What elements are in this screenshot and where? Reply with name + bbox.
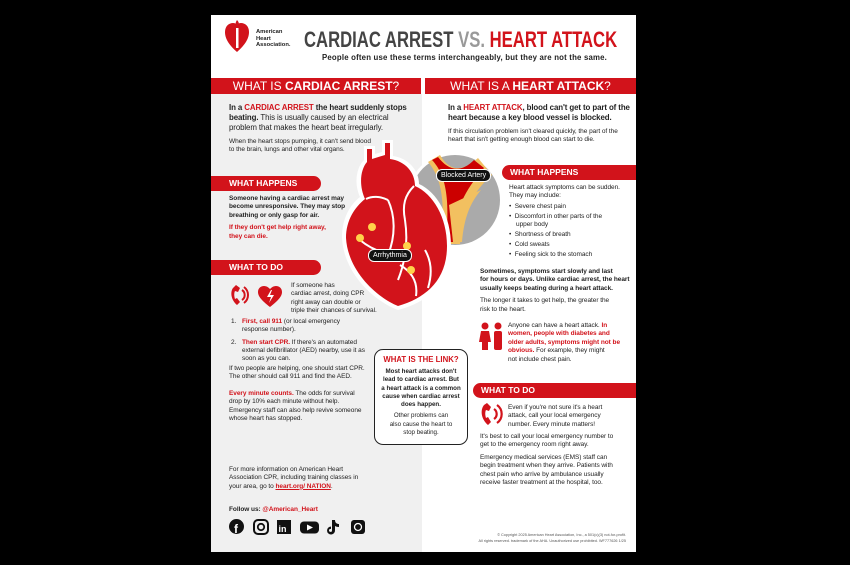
anyone text: not include chest pain. bbox=[508, 356, 572, 363]
text: chest pain who arrive by ambulance usually bbox=[480, 471, 604, 478]
label: blocked artery: Blocked Artery bbox=[441, 172, 486, 179]
every minute counts bbox=[229, 390, 362, 422]
logo: American bbox=[256, 29, 282, 35]
steps list: external defibrillator (AED) nearby, use it as bbox=[242, 347, 365, 354]
page bbox=[211, 15, 636, 552]
every minute counts: Every minute counts. The odds for survival bbox=[229, 390, 355, 397]
steps list: soon as you can. bbox=[242, 355, 290, 362]
callout: what is the link: Other problems can bbox=[394, 412, 448, 419]
callout: what is the link: cause when cardiac arrest bbox=[382, 393, 460, 400]
every minute counts: drop by 10% each minute without help. bbox=[229, 398, 339, 405]
symptoms: • Discomfort in other parts of the bbox=[509, 213, 602, 220]
copyright: All rights reserved. trademark of the AHA. Unauthorized use prohibited. WF777626 1/25 bbox=[478, 538, 626, 542]
left what happens text bbox=[229, 195, 345, 240]
logo: Association. bbox=[256, 42, 290, 48]
right what to do text: number. Every minute matters! bbox=[508, 421, 595, 428]
text: It's best to call your local emergency number to bbox=[480, 433, 613, 440]
right intro: heart because a key blood vessel is blocked. bbox=[448, 113, 612, 122]
text: get to the emergency room right away. bbox=[480, 441, 589, 448]
steps list: 2. bbox=[231, 339, 236, 346]
right intro: If this circulation problem isn't cleared quickly, the part of the bbox=[448, 128, 618, 135]
sometimes text: usually keeps beating during a heart attack. bbox=[480, 285, 613, 292]
right intro: In a HEART ATTACK, blood can't get to part of the bbox=[448, 103, 630, 112]
callout: what is the link: WHAT IS THE LINK? bbox=[383, 355, 459, 364]
pill: what happens left: WHAT HAPPENS bbox=[229, 178, 297, 188]
left intro: beating. This is usually caused by an electrical bbox=[229, 113, 389, 122]
sometimes text: Sometimes, symptoms start slowly and last bbox=[480, 268, 613, 275]
sometimes text: for hours or days. Unlike cardiac arrest, the heart bbox=[480, 276, 630, 283]
CPR text bbox=[291, 282, 377, 314]
follow us: Follow us: @American_Heart bbox=[229, 506, 318, 513]
pill: what to do left: WHAT TO DO bbox=[229, 262, 283, 272]
steps list: response number). bbox=[242, 326, 296, 333]
more info: your area, go to heart.org/ NATION. bbox=[229, 483, 333, 490]
bar: what happens right: WHAT HAPPENS bbox=[510, 167, 578, 177]
label: arrhythmia: Arrhythmia bbox=[373, 252, 407, 259]
CPR text: If someone has bbox=[291, 282, 335, 289]
left what happens text: become unresponsive. They may stop bbox=[229, 203, 345, 210]
anyone text: older adults, symptoms might not be bbox=[508, 339, 620, 346]
subtitle: People often use these terms interchangeably, but they are not the same. bbox=[322, 53, 607, 62]
left what happens text: Someone having a cardiac arrest may bbox=[229, 195, 344, 202]
steps list: 1. bbox=[231, 318, 236, 325]
callout: what is the link: also cause the heart to bbox=[390, 421, 452, 428]
steps list bbox=[231, 318, 365, 362]
callout: what is the link bbox=[374, 349, 468, 445]
illustration: heart and blocked artery bbox=[342, 140, 500, 310]
header bar: heart attack: WHAT IS A HEART ATTACK? bbox=[450, 79, 611, 93]
bar: what to do right bbox=[473, 383, 636, 398]
text: begin treatment when they arrive. Patients with bbox=[480, 462, 613, 469]
more info: Association CPR, including training classes in bbox=[229, 474, 358, 481]
symptoms: • Severe chest pain bbox=[509, 203, 566, 210]
header bar: cardiac arrest: WHAT IS CARDIAC ARREST? bbox=[233, 79, 399, 93]
pill: what happens left bbox=[211, 176, 321, 191]
anyone text: women, people with diabetes and bbox=[508, 330, 610, 337]
copyright: © Copyright 2025 American Heart Association, Inc., a 501(c)(3) not-for-profit. bbox=[497, 533, 626, 537]
CPR text: triple their chances of survival. bbox=[291, 307, 377, 314]
title: CARDIAC ARREST VS. HEART ATTACK bbox=[304, 27, 617, 52]
every minute counts: Emergency staff can also help revive someone bbox=[229, 407, 361, 414]
symptoms: Heart attack symptoms can be sudden. bbox=[509, 184, 620, 191]
CPR text: cardiac arrest, doing CPR bbox=[291, 290, 364, 297]
text: Emergency medical services (EMS) staff can bbox=[480, 454, 607, 461]
left intro bbox=[229, 103, 407, 153]
left intro: In a CARDIAC ARREST the heart suddenly stops bbox=[229, 103, 407, 112]
header bar: cardiac arrest bbox=[211, 78, 421, 94]
anyone text: obvious. For example, they might bbox=[508, 347, 605, 354]
label: blocked artery bbox=[436, 169, 491, 182]
CPR text: right away can double or bbox=[291, 299, 361, 306]
sometimes text bbox=[480, 268, 630, 313]
two people text: If two people are helping, one should start CPR. bbox=[229, 365, 365, 372]
icons: phone and heart bbox=[231, 285, 282, 307]
icon: people bbox=[479, 322, 502, 350]
left intro: problem that makes the heart beat irregularly. bbox=[229, 123, 383, 132]
symptoms: • Shortness of breath bbox=[509, 231, 571, 238]
label: arrhythmia bbox=[368, 249, 412, 262]
right what to do text: Even if you're not sure it's a heart bbox=[508, 404, 602, 411]
callout: what is the link: does happen. bbox=[401, 401, 441, 408]
steps list: First, call 911 (or local emergency bbox=[242, 318, 340, 325]
symptoms: upper body bbox=[516, 221, 548, 228]
left what happens text: If they don't get help right away, bbox=[229, 224, 326, 231]
logo: Heart bbox=[256, 36, 271, 42]
two people text bbox=[229, 365, 365, 380]
symptoms: • Feeling sick to the stomach bbox=[509, 251, 592, 258]
social icons: in bbox=[278, 524, 286, 534]
left intro: to the brain, lungs and other vital organs. bbox=[229, 146, 345, 153]
right intro bbox=[448, 103, 630, 143]
right intro: heart that isn't getting enough blood can start to die. bbox=[448, 136, 595, 143]
icon: phone right bbox=[482, 403, 503, 425]
anyone text: Anyone can have a heart attack. In bbox=[508, 322, 607, 329]
bar: what happens right bbox=[502, 165, 636, 180]
social icons bbox=[229, 519, 365, 535]
pill: what to do left bbox=[211, 260, 321, 275]
symptoms bbox=[509, 184, 620, 258]
callout: what is the link: lead to cardiac arrest. But bbox=[383, 376, 459, 383]
left gray column bbox=[211, 94, 422, 552]
two people text: The other should call 911 and find the AED. bbox=[229, 373, 352, 380]
left what happens text: they can die. bbox=[229, 233, 268, 240]
right what to do text bbox=[508, 404, 602, 428]
callout: what is the link: a heart attack is a common bbox=[381, 385, 461, 392]
callout: what is the link: Most heart attacks don't bbox=[386, 368, 456, 375]
anyone text bbox=[508, 322, 620, 363]
more info bbox=[229, 466, 358, 490]
right what to do text: attack, call your local emergency bbox=[508, 412, 601, 419]
more info: For more information on American Heart bbox=[229, 466, 343, 473]
left intro: When the heart stops pumping, it can't send blood bbox=[229, 138, 371, 145]
symptoms: • Cold sweats bbox=[509, 241, 550, 248]
left what happens text: breathing or only gasp for air. bbox=[229, 212, 319, 219]
copyright bbox=[478, 533, 626, 543]
bar: what to do right: WHAT TO DO bbox=[481, 385, 535, 395]
logo bbox=[225, 20, 290, 52]
symptoms: They may include: bbox=[509, 192, 561, 199]
every minute counts: whose heart has stopped. bbox=[229, 415, 302, 422]
steps list: Then start CPR. If there's an automated bbox=[242, 339, 357, 346]
callout: what is the link: stop beating. bbox=[403, 429, 439, 436]
header bar: heart attack bbox=[425, 78, 636, 94]
sometimes text: The longer it takes to get help, the greater the bbox=[480, 297, 609, 304]
text: receive faster treatment at the hospital, too. bbox=[480, 479, 603, 486]
sometimes text: risk to the heart. bbox=[480, 306, 526, 313]
